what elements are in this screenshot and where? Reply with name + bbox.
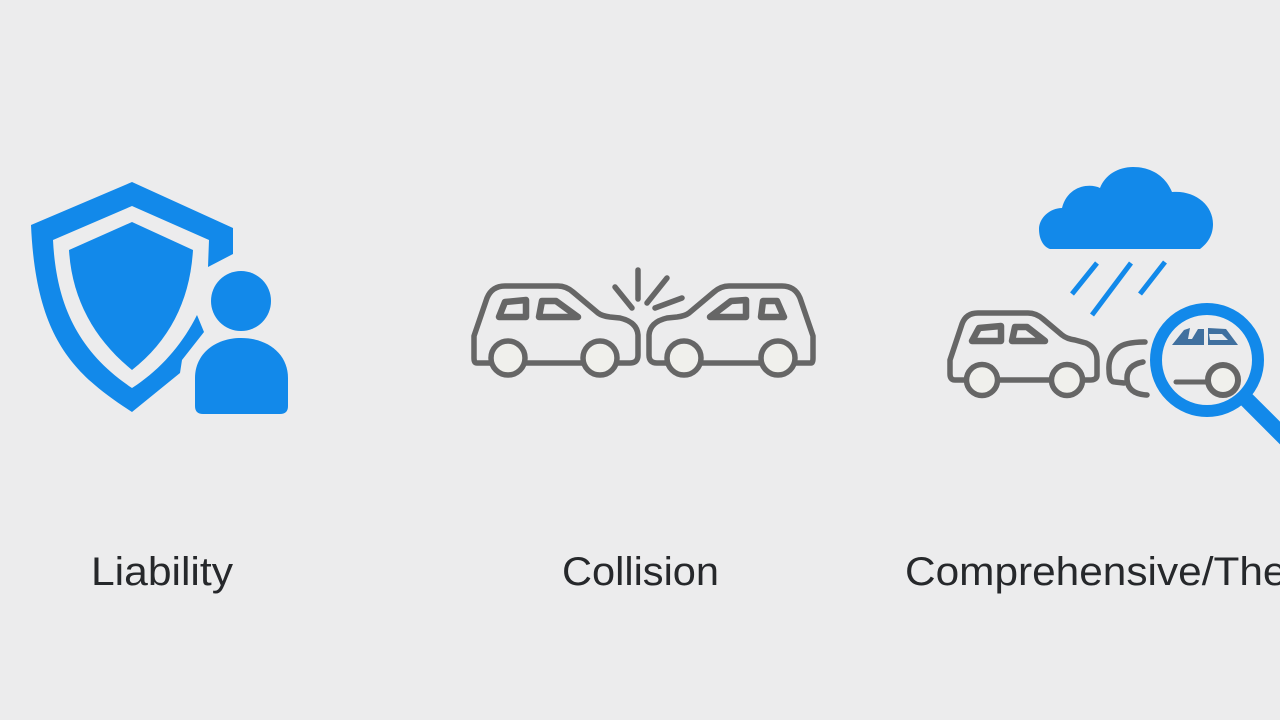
- panel: collision: [474, 270, 813, 594]
- icon: two cars colliding: [474, 270, 813, 375]
- icon: rain cloud: [1039, 167, 1213, 315]
- label: liability: Liability: [91, 550, 233, 594]
- icon: damaged car: [950, 313, 1147, 396]
- icon: shield with person: [31, 182, 288, 414]
- icon: magnifying glass: [1156, 309, 1280, 443]
- panel: comprehensive/theft: [905, 167, 1280, 594]
- panel: liability: [31, 182, 288, 594]
- label: comprehensive/theft: Comprehensive/Theft: [905, 550, 1280, 594]
- label: collision: Collision: [562, 550, 719, 594]
